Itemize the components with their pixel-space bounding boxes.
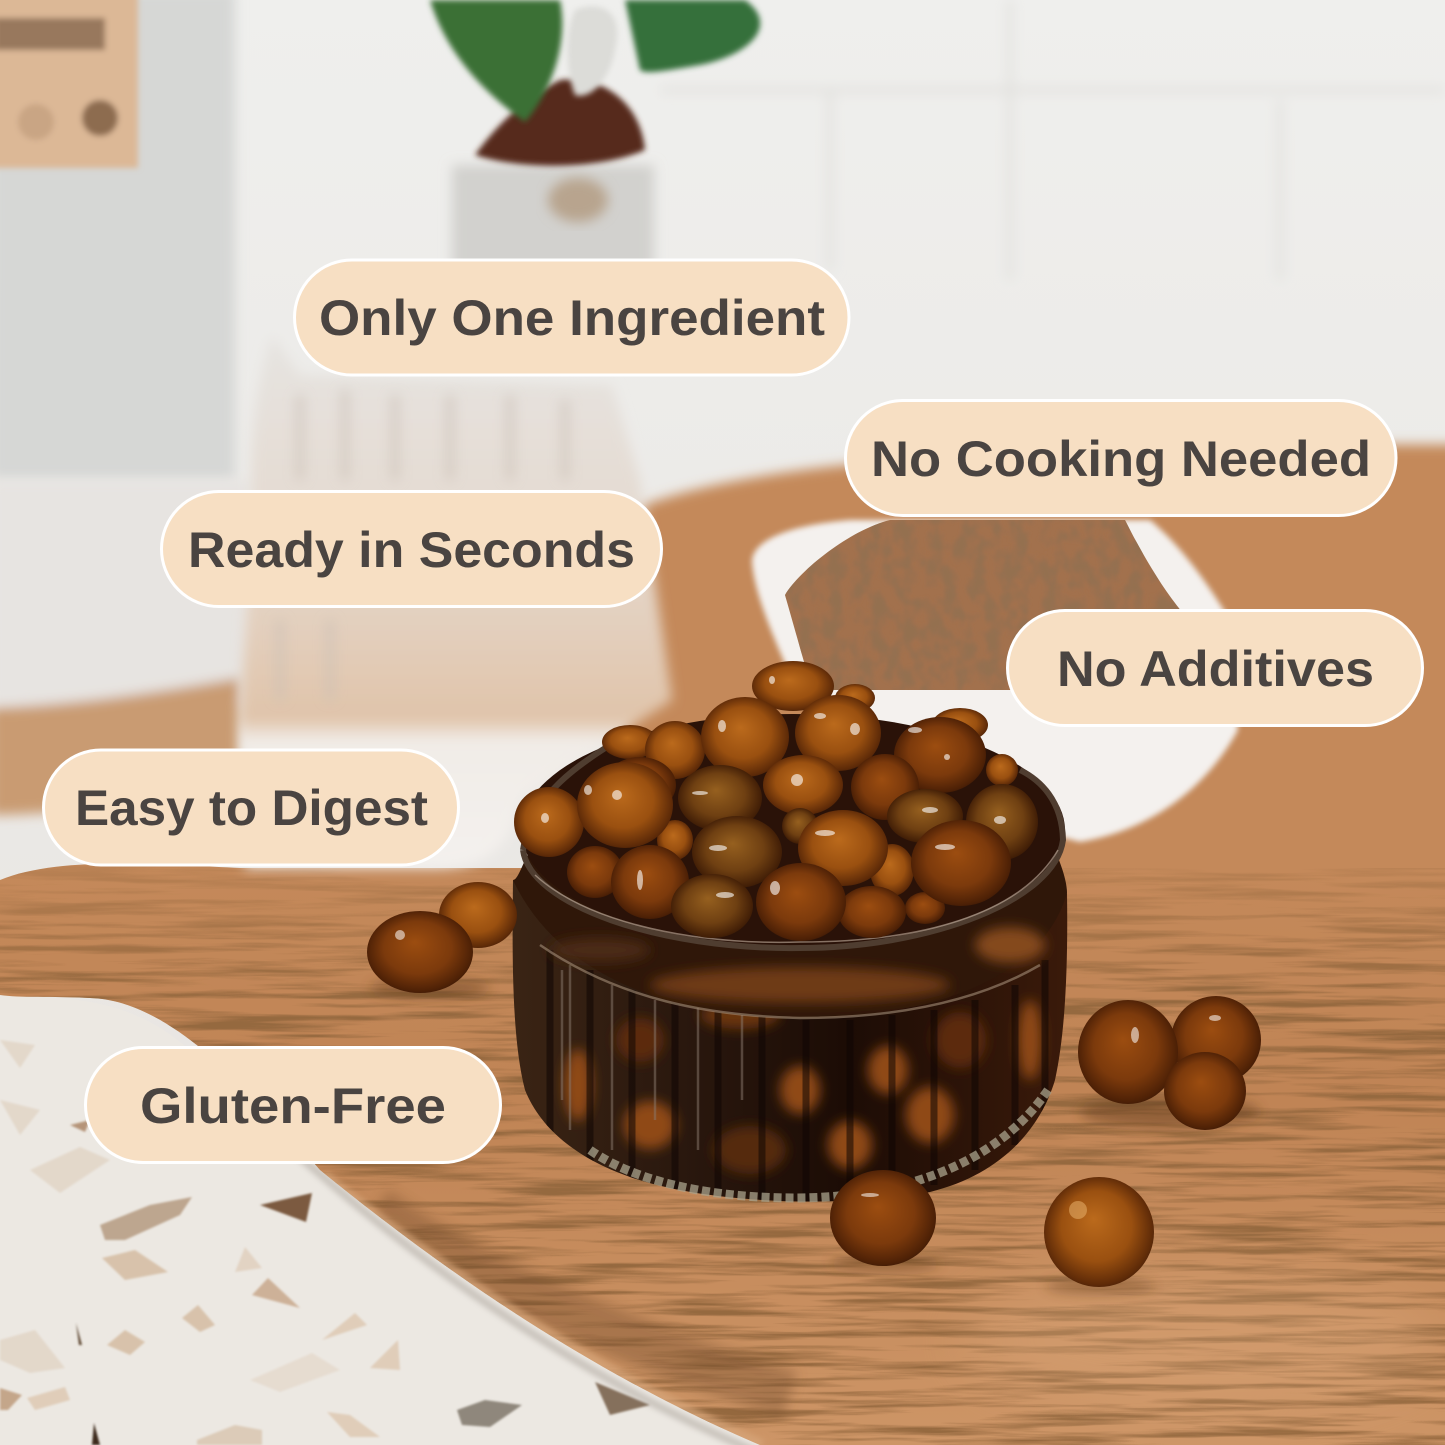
photo background: potted plant <box>430 0 760 275</box>
photo background: terrazzo counter <box>0 995 760 1445</box>
label: Easy to Digest: Easy to Digest <box>75 780 428 836</box>
label: Only One Ingredient: Only One Ingredient <box>319 290 825 346</box>
white bowl of brown sugar <box>752 515 1238 842</box>
label: Ready in Seconds <box>162 492 662 606</box>
label: No Additives <box>1008 610 1422 726</box>
loose boba pearls <box>367 882 1261 1293</box>
label: Only One Ingredient <box>294 260 849 375</box>
label: Easy to Digest <box>44 750 458 865</box>
glass water jug <box>240 335 672 868</box>
jar rim <box>521 714 1065 946</box>
label: Gluten-Free <box>86 1048 500 1162</box>
label: No Cooking Needed <box>846 400 1396 516</box>
label: Ready in Seconds: Ready in Seconds <box>188 522 635 578</box>
jar body <box>513 880 1067 1202</box>
label: Gluten-Free: Gluten-Free <box>140 1078 446 1134</box>
photo background: blurred product label <box>0 0 138 168</box>
label: No Additives: No Additives <box>1057 641 1374 697</box>
glass jar filled with boba <box>513 661 1067 1203</box>
jar base rim <box>590 1090 1048 1198</box>
wooden cutting board <box>0 444 1445 1445</box>
boba pearls in jar <box>514 661 1038 941</box>
glass ribs <box>550 950 1045 1203</box>
photo background: blurred bowl at left <box>0 480 250 815</box>
label: No Cooking Needed: No Cooking Needed <box>871 431 1371 487</box>
pearl highlights <box>541 676 1006 898</box>
boba seen through jar <box>564 1000 1042 1174</box>
jar neck band <box>513 840 1067 1018</box>
